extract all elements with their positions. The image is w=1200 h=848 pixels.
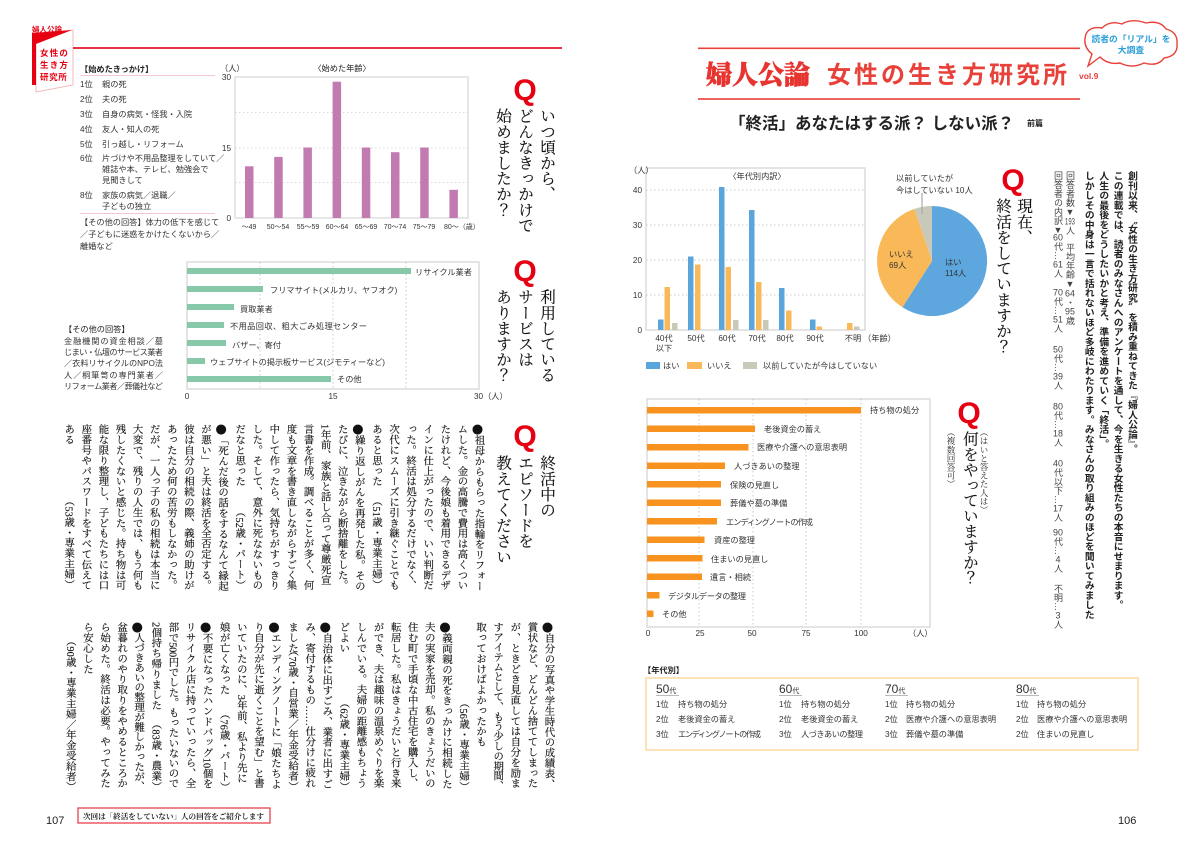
episode text: lower block: み、寄付するもの……仕分けに疲れ — [303, 622, 314, 788]
question 3 heading — [494, 455, 556, 564]
note: 利用サービス その他の回答 — [64, 324, 163, 391]
episode text: lower block: ● 自治体に出すごみ、業者に出すご — [317, 622, 333, 789]
column: 80代: 持ち物の処分 — [1037, 699, 1086, 709]
question 4 heading: 現在、 — [1015, 198, 1032, 245]
bar chart: 利用しているサービス: 買取業者 — [240, 304, 273, 314]
ranking list: 始めたきっかけ: 夫の死 — [102, 94, 127, 104]
bar chart: 始めた年齢: 〈始めた年齢〉 — [313, 63, 371, 73]
episode text: lower block: リサイクル店に持っていったら、全 — [184, 622, 195, 788]
bar chart: 何をやっていますか: 人づきあいの整理 — [734, 461, 800, 471]
bar chart: 利用しているサービス: リサイクル業者 — [415, 267, 472, 277]
column: 80代: 医療や介護への意思表明 — [1037, 714, 1127, 724]
column: 70代: 葬儀や墓の準備 — [906, 729, 963, 739]
bar chart: 始めた年齢: 55～59 — [297, 224, 319, 231]
episode text: lower block — [64, 622, 556, 792]
question 2 heading: 利用している — [538, 289, 555, 383]
episode text: lower block: 賞状など、どんどん捨ててしまった — [525, 622, 536, 788]
column: 80代: 1位 — [1016, 699, 1029, 709]
ranking list: 始めたきっかけ: 引っ越し・リフォーム — [102, 139, 184, 149]
episode text: upper block: ムした。金の高騰で費用は高くつい — [455, 424, 466, 590]
episode text: lower block: 娘が亡くなった — [218, 622, 229, 695]
column: 80代 — [1016, 682, 1127, 739]
episode text: lower block: すアイテムとして、もう少しの期間、 — [491, 622, 502, 790]
question 3 mark: Q — [513, 420, 537, 453]
bar chart: 利用しているサービス: バザー、寄付 — [232, 340, 281, 350]
page header tab: left page — [32, 24, 562, 92]
episode text: lower block: ができ、夫は趣味の温泉めぐりを楽 — [372, 622, 383, 788]
pie chart: 終活をしていますか: 今はしていない 10人 — [896, 185, 973, 195]
bar chart: 利用しているサービス: 30（人） — [474, 392, 508, 401]
bar chart: 年代別内訳 — [629, 166, 896, 353]
episode text: upper block: 残したくないと感じた。持ち物は可 — [114, 424, 125, 590]
episode text: upper block: った。終活は処分するだけでなく、 — [404, 424, 415, 590]
episode text: upper block: した。そして、意外に死なないもの — [250, 424, 261, 590]
bar chart: 始めた年齢: 75～79 — [413, 224, 435, 231]
bar chart: 何をやっていますか: デジタルデータの整理 — [668, 591, 746, 601]
episode text: lower block: 住む町で手頃な中古住宅を購入し、 — [406, 622, 417, 788]
bar chart: 始めた年齢: 60～64 — [326, 224, 348, 231]
pie chart: 終活をしていますか: はい — [945, 258, 961, 267]
note: 利用サービス その他の回答: リフォーム業者／葬儀社など — [64, 381, 163, 391]
bar chart: 始めた年齢: 0 — [226, 214, 231, 223]
episode text: lower block: ました — [286, 622, 297, 653]
note: 利用サービス その他の回答: 【その他の回答】 — [64, 324, 130, 334]
bar chart: 年代別内訳: 90代 — [806, 333, 824, 343]
episode text: lower block: （70歳・自営業／年金受給者） — [286, 646, 297, 792]
ranking list: 始めたきっかけ: 親の死 — [102, 80, 127, 89]
question 5 main text: 何をやっていますか？ — [961, 431, 978, 585]
subtitle: 「終活」あなたはする派？ しない派？ — [729, 114, 1014, 133]
title banner: right page: 婦人公論 — [706, 61, 810, 90]
question 3 heading: 終活中の — [538, 455, 555, 517]
bar chart: 利用しているサービス: 不用品回収、粗大ごみ処理センター — [230, 321, 367, 331]
column: 50代 — [656, 682, 761, 739]
column: 50代: 持ち物の処分 — [678, 699, 727, 709]
bar chart: 利用しているサービス: 0 — [185, 392, 190, 401]
note: 利用サービス その他の回答: 人／桐箪笥の専門業者／ — [64, 370, 163, 380]
title banner: right page: 女性の生き方研究所 — [827, 62, 1070, 89]
column: 60代: 人づきあいの整理 — [801, 729, 863, 739]
question 3 heading: 教えてください — [494, 455, 511, 564]
episode text: lower block: ら安心した — [81, 622, 92, 674]
bar chart: 始めた年齢: （人） — [220, 64, 245, 73]
column: 70代: 70代 — [885, 682, 905, 696]
pie chart: 終活をしていますか: 114人 — [945, 269, 966, 278]
episode text: upper block: が悪い」と夫は終活を全否定する。 — [199, 424, 210, 590]
bar chart: 何をやっていますか: 医療や介護への意思表明 — [757, 442, 847, 452]
episode text: upper block: 度も文章を書き直しながらすごく集 — [284, 424, 295, 590]
episode text: lower block: 盆暮れのやり取りをやめるところか — [115, 622, 126, 788]
legend: 年代別内訳: 以前していたが今はしていない — [763, 360, 877, 370]
column: 70代 — [885, 682, 996, 739]
note: 利用サービス その他の回答: じまい・仏壇のサービス業者 — [64, 347, 163, 357]
speech bubble: 読者のリアル: 読者の「リアル」を — [1091, 33, 1171, 44]
intro text: 創刊以来、〝女性の生き方研究〟を積み重ねてきた『婦人公論』。 — [1126, 171, 1137, 454]
legend: 年代別内訳: はい — [663, 362, 679, 370]
bar chart: 始めた年齢: 80～（歳） — [444, 222, 480, 231]
ranking list: 始めたきっかけ: 8位 — [80, 190, 93, 200]
ranking list: 始めたきっかけ — [80, 64, 224, 251]
episode text: upper block: ● 祖母からもらった指輪をリフォー — [470, 424, 486, 591]
column: 80代: 住まいの見直し — [1037, 729, 1094, 739]
bar chart: 何をやっていますか: 遺言・相続 — [710, 572, 751, 582]
question 1 heading: どんなきっかけで — [516, 108, 533, 233]
bar chart: 年代別内訳: 〈年代別内訳〉 — [728, 171, 786, 181]
ranking list: 始めたきっかけ: ／子どもに迷惑をかけたくないから／ — [80, 229, 219, 239]
bar chart: 始めた年齢: 70～74 — [384, 224, 406, 231]
callout: next issue note: 次回は「終活をしていない」人の回答をご紹介します — [83, 811, 264, 821]
page header tab: left page: 研究所 — [40, 72, 67, 82]
respondent breakdown: 70 代… 51 人 — [1053, 288, 1063, 333]
title banner: right page — [698, 48, 1099, 100]
speech bubble: 読者のリアル: 大調査 — [1118, 44, 1144, 55]
bar chart: 年代別内訳: 50代 — [687, 333, 705, 343]
intro text — [1083, 171, 1138, 620]
respondent breakdown: 回答者の内訳▼ — [1053, 171, 1063, 235]
bar chart: 年代別内訳: 20 — [633, 256, 642, 265]
episode text: lower block: （90歳・専業主婦／年金受給者） — [64, 636, 75, 792]
column: 50代: エンディングノートの作成 — [678, 729, 761, 739]
bar chart: 年代別内訳: 30 — [633, 221, 642, 230]
respondent count — [1065, 171, 1075, 325]
column: 60代: 1位 — [779, 699, 792, 709]
title banner: right page: vol.9 — [1079, 71, 1099, 81]
episode text: lower block: しんでいる。夫婦の距離感もちょう — [354, 622, 365, 788]
table: 年代別ランキング — [643, 665, 1138, 750]
question 2 mark: Q — [513, 255, 537, 288]
episode text: upper block: （52歳・パート） — [233, 507, 244, 590]
column: 60代: 3位 — [779, 729, 792, 739]
question 1 mark: Q — [513, 74, 537, 107]
bar chart: 何をやっていますか: 100 — [854, 629, 868, 638]
respondent breakdown: 50 代… 39 人 — [1053, 345, 1063, 390]
callout: next issue note — [78, 808, 270, 823]
episode text: lower block: ● 自分の写真や学生時代の成績表、 — [540, 622, 556, 789]
bar chart: 始めた年齢: 15 — [222, 144, 231, 153]
bar chart: 年代別内訳: 不明 — [845, 334, 861, 343]
episode text: lower block: 部で500円でした。もったいないので — [166, 622, 177, 788]
question 4 heading: 終活をしていますか？ — [994, 198, 1011, 354]
column: 80代: 80代 — [1016, 682, 1036, 696]
bar chart: 何をやっていますか: 0 — [646, 629, 651, 638]
question 2 heading: ありますか？ — [494, 289, 511, 383]
ranking list: 始めたきっかけ: 自身の病気・怪我・入院 — [102, 109, 192, 119]
respondent breakdown: 60 代… 61 人 — [1053, 233, 1063, 278]
column: 80代: 2位 — [1016, 729, 1029, 739]
pie chart: 終活をしていますか: いいえ — [889, 250, 914, 259]
episode text: upper block — [62, 424, 486, 591]
bar chart: 年代別内訳: 80代 — [776, 333, 794, 343]
question 2 heading — [494, 289, 556, 383]
respondent breakdown — [1053, 171, 1063, 629]
episode text: lower block: 取っておけばよかったかも — [474, 622, 485, 747]
episode text: upper block: 中して作ったら、気持ちがすっきり — [267, 424, 278, 590]
ranking list: 始めたきっかけ: 見聞きして — [102, 176, 143, 185]
episode text: lower block: 夫の実家を売却。私のきょうだいの — [423, 622, 434, 788]
intro text: 人生の最後をどうしたいかと考え、準備を進めていく「終活」。 — [1097, 171, 1108, 449]
bar chart: 何をやっていますか: 75 — [801, 629, 811, 638]
ranking list: 始めたきっかけ: 片づけや不用品整理をしていて／ — [102, 153, 224, 163]
bar chart: 始めた年齢: 50～54 — [267, 224, 289, 231]
episode text: upper block: 1年前、家族と話し合って尊厳死宣 — [319, 424, 330, 585]
pie chart: 終活をしていますか — [877, 173, 987, 316]
note: 利用サービス その他の回答: ／衣料リサイクルのNPO法 — [64, 358, 163, 368]
question 1 heading: いつ頃から、 — [538, 108, 555, 202]
bar chart: 利用しているサービス: その他 — [337, 374, 362, 384]
ranking list: 始めたきっかけ: 子どもの独立 — [102, 201, 151, 211]
bar chart: 始めた年齢 — [220, 63, 480, 231]
bar chart: 年代別内訳: 70代 — [748, 333, 766, 343]
column: 70代: 医療や介護への意思表明 — [906, 714, 996, 724]
intro text: しかしその中身は一言で括れないほど多岐にわたります。みなさんの取り組みのほどを聞いてみました — [1083, 171, 1094, 620]
ranking list: 始めたきっかけ: 友人・知人の死 — [102, 124, 159, 134]
episode text: lower block: （83歳・農業） — [149, 719, 160, 792]
episode text: upper block: （53歳・専業主婦） — [62, 496, 73, 590]
table: 年代別ランキング: 【年代別】 — [643, 665, 684, 675]
column: 60代: 2位 — [779, 714, 792, 724]
column: 50代: 1位 — [656, 699, 669, 709]
bar chart: 何をやっていますか: 持ち物の処分 — [870, 405, 919, 415]
ranking list: 始めたきっかけ: 雑誌や本、テレビ、勉強会で — [102, 164, 208, 174]
episode text: lower block: ● 義両親の死をきっかけに相続した — [437, 622, 453, 789]
episode text: lower block: 転居した。私はきょうだいと行き来 — [389, 622, 400, 788]
episode text: upper block: 能な限り整理し、子どもたちには口 — [96, 424, 107, 590]
episode text: lower block: 2個持ち帰りました — [149, 622, 160, 710]
episode text: lower block: ら始めた。終活は必要。やってみた — [98, 622, 109, 788]
note: 利用サービス その他の回答: 金融機関の資金相談／墓 — [64, 336, 163, 346]
episode text: upper block: 彼は自分の相続の際、義姉の助けが — [182, 424, 193, 590]
question 5 heading — [946, 428, 989, 585]
legend: 年代別内訳: いいえ — [707, 362, 732, 370]
column: 60代: 60代 — [779, 682, 799, 696]
episode text: upper block: ● 「死んだ後の話をするなんて縁起 — [213, 424, 229, 591]
column: 60代: 老後資金の蓄え — [801, 714, 858, 724]
column: 70代: 1位 — [885, 699, 898, 709]
episode text: lower block: ● 人づきあいの整理が難しかったが、 — [129, 622, 145, 791]
respondent count: 回答者数▼ 193 人 — [1065, 171, 1075, 235]
episode text: lower block: り自分が先に逝くことを望む」と書 — [252, 622, 263, 788]
column: 70代: 持ち物の処分 — [906, 699, 955, 709]
episode text: upper block: たけれど、今後娘も着用できるデザ — [438, 424, 449, 590]
column: 50代: 2位 — [656, 714, 669, 724]
ranking list: 始めたきっかけ: 家族の病気／退職／ — [102, 190, 176, 200]
bar chart: 年代別内訳: 10 — [633, 291, 642, 300]
ranking list: 始めたきっかけ: 4位 — [80, 124, 93, 134]
episode text: lower block: ● 不要になったハンドバッグ10個を — [198, 622, 214, 789]
ranking list: 始めたきっかけ: 【始めたきっかけ】 — [80, 64, 153, 74]
bar chart: 利用しているサービス: フリマサイト(メルカリ、ヤフオク) — [270, 286, 398, 295]
respondent breakdown: 90 代… 4 人 — [1053, 528, 1063, 573]
episode text: upper block: （51歳・専業主婦） — [370, 496, 381, 590]
bar chart: 始めた年齢: 30 — [222, 73, 231, 82]
footer: page number 107: 107 — [46, 815, 64, 827]
bar chart: 何をやっていますか: その他 — [662, 609, 687, 619]
episode text: lower block: が、ときどき見直しては自分を励ま — [508, 622, 519, 788]
bar chart: 何をやっていますか: エンディングノートの作成 — [726, 517, 813, 527]
question 5 note: （複数回答可） — [946, 428, 956, 488]
bar chart: 年代別内訳: 0 — [637, 326, 642, 335]
bar chart: 年代別内訳: 40代 — [655, 333, 673, 343]
episode text: upper block: ● 繰り返しがんを再発した私。その — [350, 424, 366, 591]
bar chart: 何をやっていますか: 住まいの見直し — [711, 554, 768, 564]
footer: page number 106: 106 — [1118, 815, 1136, 827]
pie chart: 終活をしていますか: 69人 — [889, 261, 906, 270]
column: 50代: 老後資金の蓄え — [678, 714, 735, 724]
episode text: lower block: （62歳・専業主婦） — [337, 698, 348, 792]
subtitle: 前篇 — [1027, 118, 1043, 128]
question 4 heading — [994, 198, 1032, 354]
episode text: upper block: あると思った — [370, 424, 381, 486]
episode text: upper block: 座番号やパスワードをすべて伝えて — [79, 424, 90, 590]
episode text: lower block: いていたのに、3年前、私より先に — [235, 622, 246, 783]
episode text: upper block: 言書を作成。調べることが多く、何 — [302, 424, 313, 590]
respondent breakdown: 40 代以下… 17 人 — [1053, 459, 1063, 522]
bar chart: 年代別内訳: 以下 — [656, 344, 672, 353]
question 5 condition: （はいと答えた人は） — [979, 428, 989, 514]
question 2 heading: サービスは — [516, 289, 533, 367]
ranking list: 始めたきっかけ: 2位 — [80, 94, 93, 104]
ranking list: 始めたきっかけ: 3位 — [80, 109, 93, 119]
bar chart: 何をやっていますか: 老後資金の蓄え — [764, 424, 821, 434]
pie chart: 終活をしていますか: 以前していたが — [896, 173, 953, 183]
bar chart: 何をやっていますか: 50 — [747, 629, 757, 638]
bar chart: 利用しているサービス: 15 — [328, 392, 338, 401]
column: 50代: 50代 — [656, 682, 676, 696]
column: 50代: 3位 — [656, 729, 669, 739]
intro text: この連載では、読者のみなさんへのアンケートを通して、今を生きる女性たちの本音にせまります。 — [1112, 171, 1123, 610]
ranking list: 始めたきっかけ: 6位 — [80, 153, 93, 163]
episode text: lower block: （76歳・パート） — [218, 709, 229, 792]
question 1 heading — [494, 108, 556, 233]
question 3 heading: エピソードを — [516, 455, 533, 549]
episode text: lower block: （56歳・専業主婦） — [457, 698, 468, 792]
respondent count: 平均年齢▼ 64 ・ 95 歳 — [1065, 243, 1075, 325]
episode text: upper block: 次代にスムーズに引き継ぐことでも — [387, 424, 398, 590]
column: 80代: 2位 — [1016, 714, 1029, 724]
respondent breakdown: 不明… 3 人 — [1053, 584, 1063, 629]
page header tab: left page: 婦人公論 — [32, 24, 62, 34]
episode text: lower block: ● エンディングノートに「娘たちよ — [266, 622, 282, 789]
ranking list: 始めたきっかけ: 離婚など — [80, 241, 113, 251]
speech bubble: 読者のリアル — [1085, 21, 1177, 66]
bar chart: 何をやっていますか: 葬儀や墓の準備 — [730, 498, 787, 508]
legend: 年代別内訳 — [646, 360, 877, 370]
bar chart: 年代別内訳: （年齢） — [863, 333, 896, 343]
column: 70代: 2位 — [885, 714, 898, 724]
column: 60代 — [779, 682, 863, 739]
bar chart: 何をやっていますか — [646, 399, 933, 638]
respondent breakdown: 80 代… 18 人 — [1053, 402, 1063, 447]
column: 70代: 3位 — [885, 729, 898, 739]
page header tab: left page: 女性の — [40, 48, 69, 58]
bar chart: 始めた年齢: ～49 — [242, 224, 256, 231]
episode text: upper block: インに仕上がったので、いい判断だ — [421, 424, 432, 590]
ranking list: 始めたきっかけ: 1位 — [80, 79, 93, 89]
episode text: upper block: あったため何の苦労もしなかった。 — [165, 424, 176, 590]
bar chart: 年代別内訳: 40 — [633, 186, 642, 195]
question 1 heading: 始めましたか？ — [494, 108, 511, 217]
bar chart: 年代別内訳: 60代 — [718, 333, 736, 343]
ranking list: 始めたきっかけ: 【その他の回答】体力の低下を感じて — [80, 217, 219, 227]
question 4 mark: Q — [1001, 164, 1025, 197]
episode text: upper block: だなと思った — [233, 424, 244, 486]
column: 60代: 持ち物の処分 — [801, 699, 850, 709]
bar chart: 始めた年齢: 65～69 — [355, 224, 377, 231]
bar chart: 何をやっていますか: 25 — [695, 629, 705, 638]
bar chart: 年代別内訳: （人） — [629, 166, 654, 175]
episode text: upper block: たびに、泣きながら断捨離をした。 — [336, 424, 347, 590]
episode text: lower block: どよい — [337, 622, 348, 653]
bar chart: 利用しているサービス — [185, 262, 508, 401]
episode text: upper block: 大変で、残りの人生では、もう何も — [131, 424, 142, 590]
bar chart: 利用しているサービス: ウェブサイトの掲示板サービス(ジモティーなど) — [210, 357, 385, 367]
bar chart: 何をやっていますか: （人） — [908, 629, 933, 638]
page header tab: left page: 生き方 — [40, 60, 69, 70]
ranking list: 始めたきっかけ: 5位 — [80, 139, 93, 149]
bar chart: 何をやっていますか: 保険の見直し — [730, 480, 779, 490]
episode text: upper block: ある — [62, 424, 73, 445]
question 5 mark: Q — [957, 397, 981, 430]
bar chart: 何をやっていますか: 資産の整理 — [714, 535, 755, 545]
episode text: upper block: だが、一人っ子の私の相続は本当に — [148, 424, 159, 590]
